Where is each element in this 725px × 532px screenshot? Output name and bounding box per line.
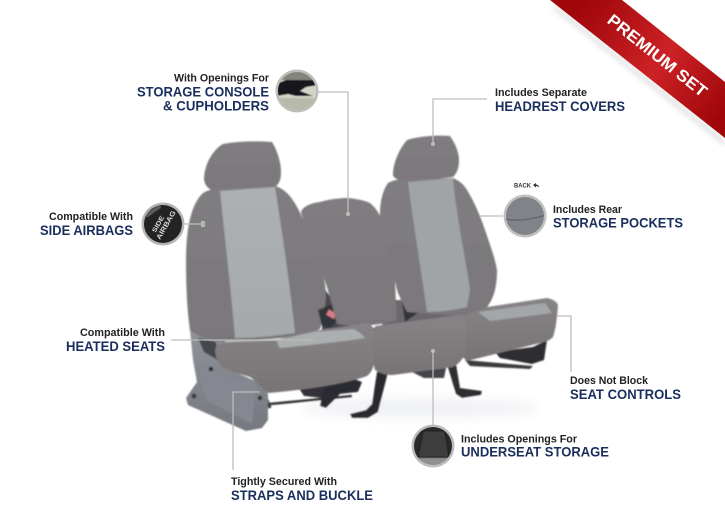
right back insert	[408, 178, 470, 312]
callout: storage pockets	[553, 204, 683, 230]
callout: storage console: With Openings For	[174, 72, 270, 84]
callout: headrest covers	[495, 87, 625, 114]
callout: storage pockets: Includes Rear	[553, 204, 623, 216]
back label: BACK	[514, 184, 532, 190]
leader line: straps and buckle	[233, 392, 260, 470]
callout: storage pockets: STORAGE POCKETS	[553, 214, 683, 230]
left seat plastic base	[186, 330, 268, 431]
callout: straps and buckle: Tightly Secured With	[231, 476, 337, 488]
right seat cushion	[455, 298, 558, 361]
callout: straps and buckle: STRAPS AND BUCKLE	[231, 487, 373, 503]
leader line: underseat storage	[431, 349, 435, 425]
icon: rear storage pocket	[504, 194, 546, 238]
callout: side airbags: SIDE AIRBAGS	[40, 222, 133, 238]
ribbon: premium set	[550, 0, 725, 146]
callout: seat controls: SEAT CONTROLS	[570, 386, 681, 402]
middle seat cushion	[373, 315, 467, 375]
right seat back	[380, 178, 497, 316]
ribbon: premium set: PREMIUM SET	[604, 11, 710, 101]
left headrest	[204, 141, 281, 191]
callout: seat controls	[570, 375, 681, 402]
dark gap between left back and middle back	[322, 285, 380, 340]
callout: storage console	[137, 72, 270, 114]
callout: storage console: & CUPHOLDERS	[163, 98, 269, 114]
leader line: side airbags	[184, 221, 205, 227]
icon: side airbag tag	[142, 202, 184, 246]
callout: underseat storage: UNDERSEAT STORAGE	[461, 444, 609, 460]
left back insert	[220, 187, 295, 338]
left seat back	[186, 186, 326, 341]
callout: underseat storage: Includes Openings For	[461, 434, 578, 446]
icon: side airbag tag: SIDE	[151, 214, 167, 234]
right seat insert	[478, 303, 552, 321]
callout: heated seats: Compatible With	[80, 327, 165, 339]
leader line: storage console	[318, 92, 350, 216]
seat belt buckle	[318, 300, 422, 328]
seat photo: three-piece bench seat covers	[186, 136, 558, 431]
right headrest	[393, 136, 459, 182]
leader line: heated seats	[171, 339, 313, 341]
callout: headrest covers: Includes Separate	[495, 87, 587, 99]
icon: side airbag tag: AIRBAG	[156, 209, 178, 241]
leader line: headrest covers	[431, 99, 487, 146]
icon: storage console detail	[275, 70, 320, 115]
callout: underseat storage	[461, 434, 609, 460]
callout: headrest covers: HEADREST COVERS	[495, 98, 625, 114]
icon: underseat storage	[412, 424, 454, 468]
leader line: storage pockets	[480, 215, 503, 217]
leader line: seat controls	[557, 316, 571, 372]
left seat cushion	[215, 323, 375, 393]
fill between middle and right sections	[380, 300, 470, 345]
callout: side airbags	[40, 211, 133, 238]
back label	[514, 183, 539, 190]
seat rails and legs	[264, 340, 547, 418]
left seat insert	[277, 329, 365, 348]
callout: seat controls: Does Not Block	[570, 375, 649, 387]
callout: heated seats: HEATED SEATS	[66, 338, 165, 354]
callout: storage console: STORAGE CONSOLE	[137, 84, 269, 100]
middle fold-down back	[301, 198, 397, 326]
floor shadow	[300, 399, 540, 417]
callout: side airbags: Compatible With	[49, 211, 133, 223]
callout: straps and buckle	[231, 476, 373, 503]
callout: heated seats	[66, 327, 165, 354]
